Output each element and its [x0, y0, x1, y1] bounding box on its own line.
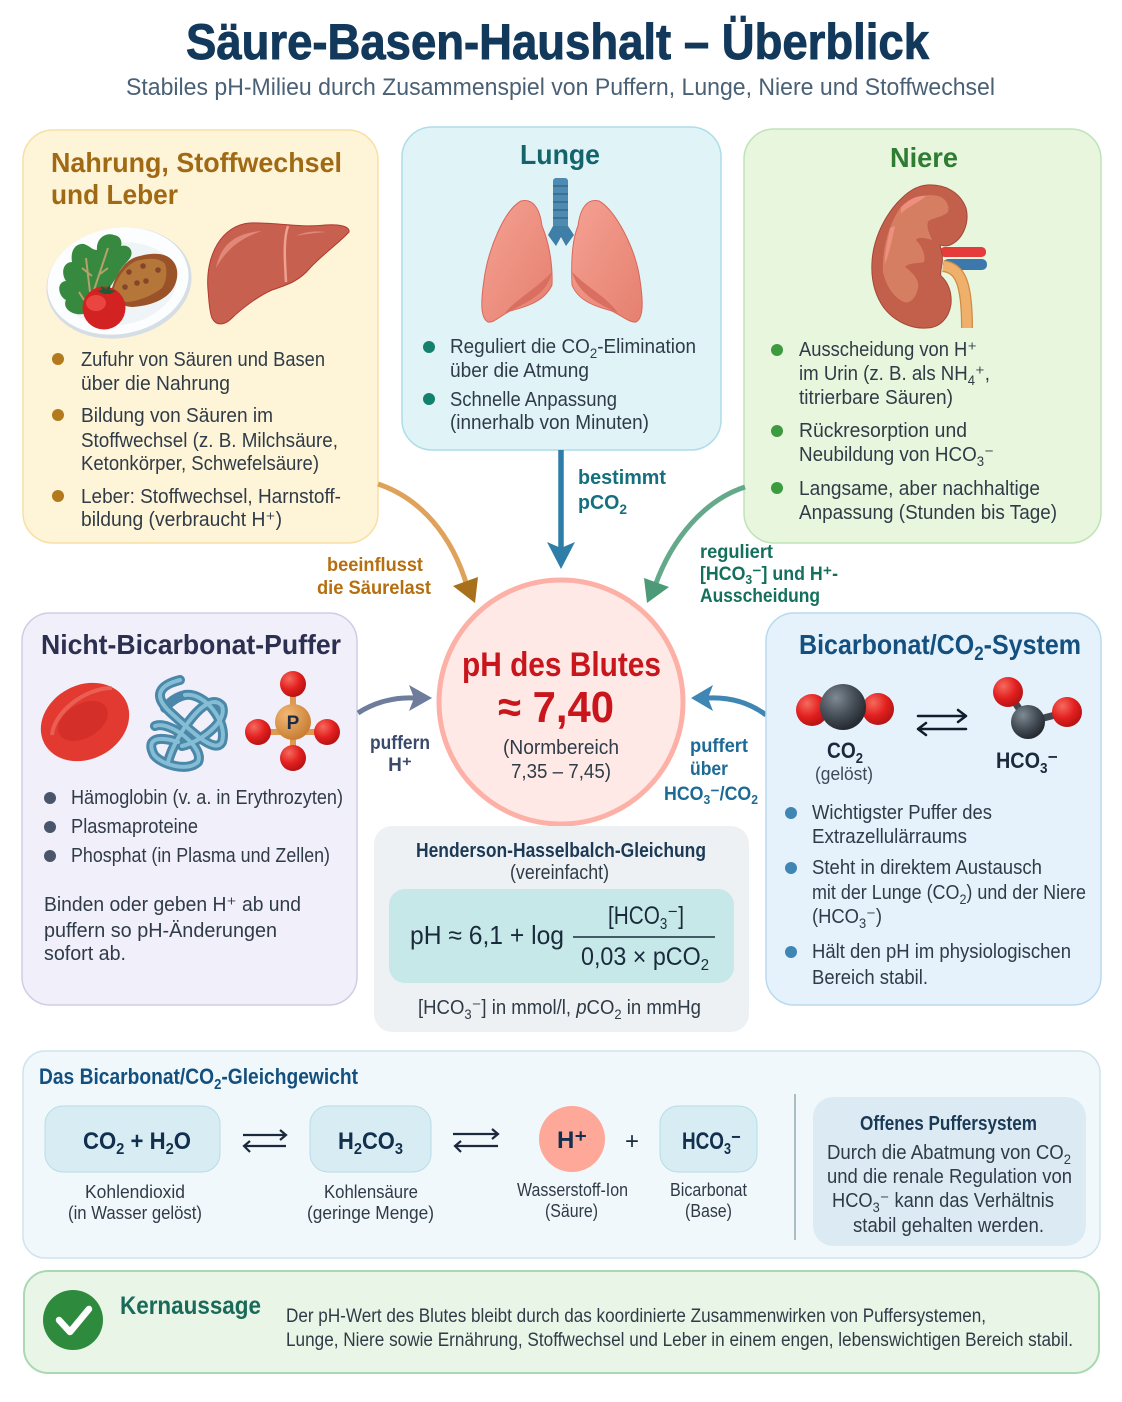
label: puffern H+	[370, 733, 430, 776]
title: Säure-Basen-Haushalt – Überblick	[186, 14, 929, 70]
heading: Nahrung: und Leber	[51, 179, 178, 210]
label: Kohlendioxid	[68, 1182, 202, 1223]
box: HCO3-	[660, 1106, 757, 1172]
formula units: [HCO	[418, 997, 468, 1019]
label: bestimmt pCO2: pCO	[578, 492, 620, 514]
label: Kohlendioxid: (in Wasser gelöst)	[68, 1203, 202, 1223]
bullet list: Lunge: 2	[590, 345, 597, 361]
label: CO2 gelöst: CO	[827, 738, 860, 763]
bullet list: Niere: im Urin (z. B. als NH	[799, 363, 980, 385]
box: Offenes Puffersystem: ⁻ kann das Verhältnis	[880, 1190, 1054, 1212]
heading: Kernaussage: Kernaussage	[120, 1292, 261, 1320]
bullet list: Niere	[771, 339, 1057, 524]
label: Wasserstoff-Ion: (Säure)	[545, 1201, 598, 1221]
label: puffert über HCO3/CO2: 3	[703, 792, 710, 807]
heading: Henderson-Hasselbalch	[416, 840, 706, 884]
bullet list: Bicarbonat: 2	[959, 891, 967, 907]
label: reguliert HCO3 und H: ⁻] und H⁺-	[752, 564, 838, 585]
box: CO2 + H2O	[45, 1106, 220, 1172]
arrow: Nahrung to pH	[378, 484, 478, 603]
bullet list: Niere: 3	[977, 453, 984, 469]
label: Kohlensäure: (geringe Menge)	[307, 1203, 434, 1223]
circle: H+	[539, 1106, 605, 1172]
formula units: in mmHg	[622, 997, 701, 1019]
label: reguliert HCO3 und H: 3	[745, 572, 752, 587]
circle: pH des Blutes: (Normbereich	[503, 737, 619, 759]
label: puffert über HCO3/CO2: HCO	[664, 784, 706, 805]
bullet list: Bicarbonat: mit der Lunge (CO	[812, 882, 977, 904]
icon: kidney	[872, 185, 987, 328]
bullet list: Puffer: Phosphat (in Plasma und Zellen)	[71, 845, 330, 867]
box: HCO3-: 3	[724, 1141, 731, 1158]
subtitle: Stabiles pH-Milieu durch Zusammenspiel von Puffern, Lunge, Niere und Stoffwechsel	[126, 74, 995, 101]
label: beeinflusst die Säurelast: die Säurelast	[317, 578, 432, 599]
label: Kohlensäure	[307, 1182, 434, 1223]
circle: pH des Blutes: pH des Blutes	[462, 646, 661, 684]
label: beeinflusst die Säurelast	[317, 555, 432, 599]
heading: Henderson-Hasselbalch: Henderson-Hasselbalch-Gleichung	[416, 840, 706, 862]
bullet list: Nahrung	[52, 349, 341, 531]
bullet list: Niere: ⁻	[984, 444, 994, 466]
heading: Nahrung: Nahrung, Stoffwechsel	[51, 147, 342, 178]
bullet list: Niere: Neubildung von HCO	[799, 444, 988, 466]
icon: phosphate molecule	[245, 671, 340, 771]
label: puffert über HCO3/CO2: über	[690, 759, 729, 780]
heading: Gleichgewicht: 2	[214, 1076, 221, 1093]
heading: Bicarbonat/CO2-System: -System	[984, 629, 1081, 660]
bullet list: Nahrung: bildung (verbraucht H⁺)	[81, 509, 282, 531]
circle: pH des Blutes: ≈ 7,40	[498, 683, 614, 732]
box: CO2 + H2O: + H	[124, 1128, 166, 1155]
label: Bicarbonat: Bicarbonat	[670, 1180, 747, 1200]
label: puffert über HCO3/CO2	[664, 736, 758, 807]
formula units: 3	[464, 1006, 472, 1022]
heading: Bicarbonat/CO2-System: Bicarbonat/CO	[799, 629, 995, 660]
formula units: pCO	[576, 997, 617, 1019]
label: Bicarbonat	[670, 1180, 747, 1221]
label: puffern H+: puffern	[370, 733, 430, 754]
arrow: Puffer to pH	[358, 685, 432, 713]
bullet list: Niere: 4	[968, 372, 975, 388]
box: CO2 + H2O: O	[174, 1128, 191, 1155]
label: bestimmt pCO2: bestimmt	[578, 467, 666, 489]
box: CO2 + H2O: 2	[166, 1141, 174, 1158]
panel: Nahrung, Stoffwechsel und Leber	[23, 130, 378, 543]
bullet list: Puffer	[44, 787, 343, 867]
label: bestimmt pCO2	[578, 467, 666, 517]
text: Puffer description: puffern so pH-Änderungen	[44, 920, 277, 942]
bullet list: Bicarbonat: Bereich stabil.	[812, 967, 928, 989]
bullet list: Lunge	[423, 336, 696, 434]
bullet list: Lunge: über die Atmung	[450, 360, 589, 382]
formula units: ⁻] in mmol/l,	[472, 997, 576, 1019]
circle: pH des Blutes: 7,35 – 7,45)	[511, 761, 611, 783]
box: Offenes Puffersystem: und die renale Regulation von	[827, 1166, 1072, 1188]
bullet list: Lunge: Schnelle Anpassung	[450, 389, 617, 411]
panel: Lunge	[402, 127, 721, 450]
bullet list: Bicarbonat: Hält den pH im physiologischen	[812, 941, 1071, 963]
circle: H+: H⁺	[557, 1127, 587, 1154]
bullet list: Puffer: Plasmaproteine	[71, 816, 198, 838]
heading: Nicht-Bicarbonat-Puffer: Nicht-Bicarbonat-Puffer	[41, 629, 341, 660]
heading: Lunge: Lunge	[520, 139, 600, 170]
box: CO2 + H2O: CO	[83, 1128, 119, 1155]
label: HCO3-: HCO	[996, 748, 1045, 773]
icon: CO2 molecule	[796, 684, 894, 730]
bullet list: Bicarbonat: Steht in direktem Austausch	[812, 857, 1042, 879]
box: H2CO3: CO	[362, 1128, 395, 1155]
label: HCO3-: ⁻	[1048, 748, 1058, 773]
bullet list: Bicarbonat: (HCO	[812, 906, 863, 928]
bullet list: Bicarbonat: ) und der Niere	[966, 882, 1086, 904]
formula: 0,03 × pCO	[581, 943, 710, 971]
text: Puffer description: sofort ab.	[44, 943, 126, 965]
plus sign: +	[625, 1128, 639, 1155]
label: beeinflusst die Säurelast: beeinflusst	[327, 555, 424, 576]
formula	[389, 889, 734, 983]
heading: Henderson-Hasselbalch: (vereinfacht)	[510, 862, 609, 884]
arrow: Niere to pH	[644, 487, 745, 603]
label: reguliert HCO3 und H	[700, 542, 838, 607]
panel: Das Bicarbonat/CO2-Gleichgewicht	[23, 1051, 1100, 1258]
formula: 3	[660, 916, 667, 933]
icon: red blood cell	[27, 668, 143, 776]
panel: Niere	[744, 129, 1101, 543]
label: bestimmt pCO2: 2	[619, 501, 627, 517]
icon: liver	[208, 223, 349, 324]
box: HCO3-: ⁻	[731, 1128, 741, 1155]
box: Offenes Puffersystem: Durch die Abatmung von CO	[827, 1142, 1082, 1164]
formula units: 2	[614, 1006, 622, 1022]
box: Offenes Puffersystem: Offenes Puffersystem	[860, 1113, 1037, 1135]
box: H2CO3: 2	[354, 1141, 362, 1158]
panel: Kernaussage	[24, 1271, 1099, 1373]
box: H2CO3: 3	[395, 1141, 403, 1158]
label: CO2 gelöst	[815, 738, 873, 784]
label: Wasserstoff-Ion: Wasserstoff-Ion	[517, 1180, 628, 1200]
bullet list: Niere: Ausscheidung von H⁺	[799, 339, 977, 361]
panel: Nicht-Bicarbonat-Puffer	[22, 613, 357, 1005]
bullet list: Niere: Anpassung (Stunden bis Tage)	[799, 502, 1057, 524]
bullet list: Nahrung: Stoffwechsel (z. B. Milchsäure,	[81, 430, 338, 452]
box: CO2 + H2O: 2	[116, 1141, 124, 1158]
bullet list: Bicarbonat: Extrazellulärraums	[812, 826, 967, 848]
box: Offenes Puffersystem: stabil gehalten werden.	[853, 1215, 1044, 1237]
label: reguliert HCO3 und H: [HCO	[700, 564, 749, 585]
bullet list: Nahrung: über die Nahrung	[81, 373, 230, 395]
label: Bicarbonat: (Base)	[685, 1201, 732, 1221]
heading: Gleichgewicht: -Gleichgewicht	[221, 1064, 359, 1089]
icon: equilibrium arrows	[918, 710, 966, 735]
icon: protein tangle	[151, 680, 223, 767]
icon: lungs	[482, 178, 642, 322]
bullet list: Lunge: -Elimination	[597, 336, 696, 358]
icon: check mark	[43, 1290, 103, 1350]
label: puffert über HCO3/CO2: 2	[751, 792, 758, 807]
formula: pH ≈ 6,1 + log	[410, 920, 564, 950]
bullet list: Bicarbonat	[785, 802, 1086, 989]
label: reguliert HCO3 und H: reguliert	[700, 542, 774, 563]
bullet list: Niere: Rückresorption und	[799, 420, 967, 442]
panel: Bicarbonat/CO2-System	[766, 613, 1101, 1005]
label: puffern H+: H⁺	[388, 755, 412, 776]
arrow: equilibrium 2	[453, 1129, 498, 1152]
box: HCO3-: HCO	[682, 1128, 735, 1155]
bullet list: Bicarbonat: Wichtigster Puffer des	[812, 802, 992, 824]
label: Kohlensäure: Kohlensäure	[324, 1182, 418, 1202]
bullet list: Niere: ⁺,	[975, 363, 990, 385]
bullet list: Bicarbonat: ⁻)	[866, 906, 882, 928]
heading: Nahrung	[51, 147, 342, 210]
formula: [HCO	[608, 902, 670, 930]
bullet list: Nahrung: Ketonkörper, Schwefelsäure)	[81, 453, 319, 475]
bullet list: Nahrung: Bildung von Säuren im	[81, 405, 273, 427]
box: H2CO3	[310, 1106, 431, 1172]
heading: Niere: Niere	[890, 142, 958, 173]
bullet list: Nahrung: Zufuhr von Säuren und Basen	[81, 349, 325, 371]
label: CO2 gelöst: (gelöst)	[815, 764, 873, 784]
label: HCO3-: 3	[1040, 760, 1048, 777]
arrow: equilibrium 1	[243, 1130, 286, 1152]
label: Kohlendioxid: Kohlendioxid	[85, 1182, 185, 1202]
bullet list: Nahrung: Leber: Stoffwechsel, Harnstoff-	[81, 486, 341, 508]
text: Puffer description	[44, 894, 301, 965]
box: Offenes Puffersystem: HCO	[832, 1190, 876, 1212]
box: Offenes Puffersystem: 3	[873, 1199, 880, 1215]
text: Kernaussage	[286, 1306, 1073, 1351]
arrow: Lunge to pH	[547, 450, 575, 569]
bullet list: Puffer: Hämoglobin (v. a. in Erythrozyten)	[71, 787, 343, 809]
formula: ⁻]	[667, 902, 684, 930]
icon: phosphate molecule: P	[287, 713, 300, 734]
arrow: Bicarbonat to pH	[691, 685, 766, 715]
box: H2CO3: H	[338, 1128, 355, 1155]
box: Offenes Puffersystem: 2	[1064, 1151, 1071, 1167]
heading: Bicarbonat/CO2-System: 2	[974, 644, 984, 665]
formula: 2	[701, 957, 709, 974]
bullet list: Niere: Langsame, aber nachhaltige	[799, 478, 1040, 500]
label: puffert über HCO3/CO2: puffert	[690, 736, 749, 757]
bullet list: Niere: titrierbare Säuren)	[799, 387, 953, 409]
label: puffert über HCO3/CO2: ⁻/CO	[710, 784, 751, 805]
box: Offenes Puffersystem	[813, 1097, 1086, 1246]
panel: Henderson-Hasselbalch-Gleichung	[374, 826, 749, 1032]
label: Wasserstoff-Ion	[517, 1180, 628, 1221]
bullet list: Bicarbonat: 3	[859, 915, 866, 931]
icon: HCO3 molecule	[993, 677, 1082, 739]
label: reguliert HCO3 und H: Ausscheidung	[700, 586, 820, 607]
text: Kernaussage: Der pH-Wert des Blutes bleibt durch das koordinierte Zusammenwirken von Puffersystemen,	[286, 1306, 986, 1327]
heading: Gleichgewicht: Das Bicarbonat/CO	[39, 1064, 240, 1089]
circle: pH des Blutes	[439, 580, 683, 824]
bullet list: Lunge: (innerhalb von Minuten)	[450, 412, 649, 434]
bullet list: Lunge: Reguliert die CO	[450, 336, 598, 358]
text: Puffer description: Binden oder geben H⁺ ab und	[44, 894, 301, 916]
label: CO2 gelöst: 2	[856, 750, 863, 767]
icon: food plate	[38, 216, 200, 350]
